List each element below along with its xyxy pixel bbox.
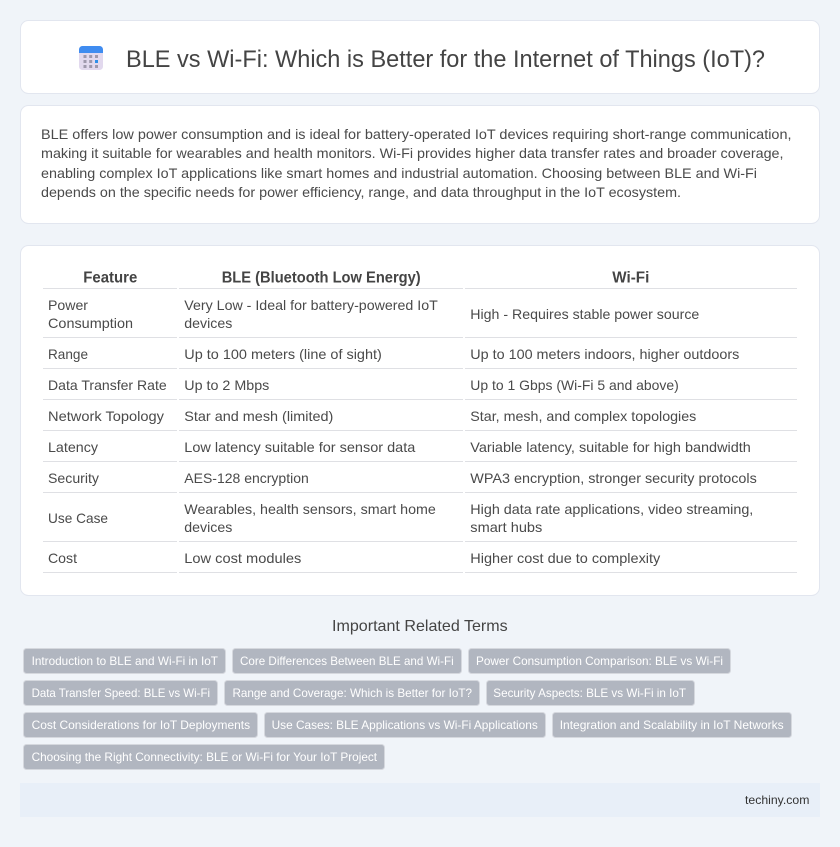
related terms tags — [24, 648, 792, 770]
panel: comparison table — [20, 246, 820, 596]
title: BLE vs Wi-Fi: Which is Better for the Internet of Things (IoT)? — [126, 46, 765, 73]
row: data transfer rate: Data Transfer Rate — [48, 377, 167, 393]
text block: summary paragraph: depends on the specific needs for power efficiency, range, and data throughput in the IoT ecosystem. — [41, 184, 681, 200]
tag: Cost Considerations for IoT Deployments — [32, 718, 250, 732]
row: security: Security — [48, 470, 99, 486]
row: cost — [48, 550, 660, 566]
row: network topology — [48, 408, 696, 424]
row: data transfer rate: Up to 1 Gbps (Wi-Fi 5 and above) — [470, 377, 679, 393]
text block: summary paragraph — [41, 126, 791, 200]
tag: Use Cases: BLE Applications vs Wi-Fi Applications — [272, 718, 538, 732]
row: network topology: Star, mesh, and complex topologies — [470, 408, 696, 424]
row: network topology: Star and mesh (limited) — [184, 408, 333, 424]
tag — [224, 680, 480, 706]
text block: summary paragraph: enabling complex IoT applications like smart homes and industrial automation. Choosing between BLE and Wi-Fi — [41, 165, 757, 181]
row: power consumption: High - Requires stable power source — [470, 306, 700, 322]
row: latency: Low latency suitable for sensor data — [184, 439, 416, 455]
tag: Integration and Scalability in IoT Networks — [560, 718, 784, 732]
row: security: AES-128 encryption — [184, 470, 309, 486]
row: cost: Cost — [48, 550, 77, 566]
row: power consumption: Power — [48, 297, 88, 313]
row: range: Range — [48, 346, 88, 362]
tag — [24, 648, 226, 674]
footer: techiny.com — [745, 793, 809, 807]
row: power consumption: devices — [184, 315, 232, 331]
tag: Security Aspects: BLE vs Wi-Fi in IoT — [493, 686, 687, 700]
row: cost: Low cost modules — [184, 550, 301, 566]
tag — [24, 744, 384, 770]
tag — [24, 712, 258, 738]
tag — [552, 712, 792, 738]
row: security — [48, 470, 757, 486]
table header: Feature — [83, 270, 137, 286]
tag — [486, 680, 694, 706]
heading: important related terms: Important Related Terms — [332, 618, 508, 635]
row: use case: devices — [184, 519, 232, 535]
tag: Power Consumption Comparison: BLE vs Wi-Fi — [476, 654, 723, 668]
row: power consumption: Very Low - Ideal for battery-powered IoT — [184, 297, 438, 313]
row: range: Up to 100 meters (line of sight) — [184, 346, 382, 362]
tag — [232, 648, 462, 674]
tag: Introduction to BLE and Wi-Fi in IoT — [32, 654, 219, 668]
tag: Data Transfer Speed: BLE vs Wi-Fi — [32, 686, 210, 700]
row: network topology: Network Topology — [48, 408, 164, 424]
row: data transfer rate — [48, 377, 679, 393]
tag: Range and Coverage: Which is Better for IoT? — [232, 686, 472, 700]
row: cost: Higher cost due to complexity — [470, 550, 660, 566]
table header: Wi-Fi — [612, 270, 649, 286]
row: latency: Variable latency, suitable for high bandwidth — [470, 439, 751, 455]
row: latency: Latency — [48, 439, 98, 455]
tag — [468, 648, 730, 674]
row: security: WPA3 encryption, stronger security protocols — [470, 470, 757, 486]
tag — [264, 712, 546, 738]
footer — [20, 783, 820, 817]
icon: calendar grid — [79, 46, 103, 70]
tag: Choosing the Right Connectivity: BLE or Wi-Fi for Your IoT Project — [32, 750, 378, 764]
row: data transfer rate: Up to 2 Mbps — [184, 377, 269, 393]
row: range: Up to 100 meters indoors, higher outdoors — [470, 346, 739, 362]
panel: introduction text — [20, 106, 820, 224]
row: power consumption — [48, 297, 700, 331]
row: use case: Use Case — [48, 510, 108, 526]
row: use case: Wearables, health sensors, smart home — [184, 501, 436, 517]
row: use case — [48, 501, 753, 535]
row: use case: High data rate applications, video streaming, — [470, 501, 753, 517]
row: use case: smart hubs — [470, 519, 542, 535]
row: latency — [48, 439, 751, 455]
tag — [24, 680, 218, 706]
title panel — [20, 20, 820, 94]
row: range — [48, 346, 739, 362]
tag: Core Differences Between BLE and Wi-Fi — [240, 654, 454, 668]
table header: BLE (Bluetooth Low Energy) — [222, 270, 421, 286]
text block: summary paragraph: making it suitable for wearables and health monitors. Wi-Fi provides higher data transfer rates and broader coverage, — [41, 145, 784, 161]
row: power consumption: Consumption — [48, 315, 133, 331]
text block: summary paragraph: BLE offers low power consumption and is ideal for battery-operated IoT devices requiring short-range communication, — [41, 126, 791, 142]
table header — [83, 270, 649, 286]
